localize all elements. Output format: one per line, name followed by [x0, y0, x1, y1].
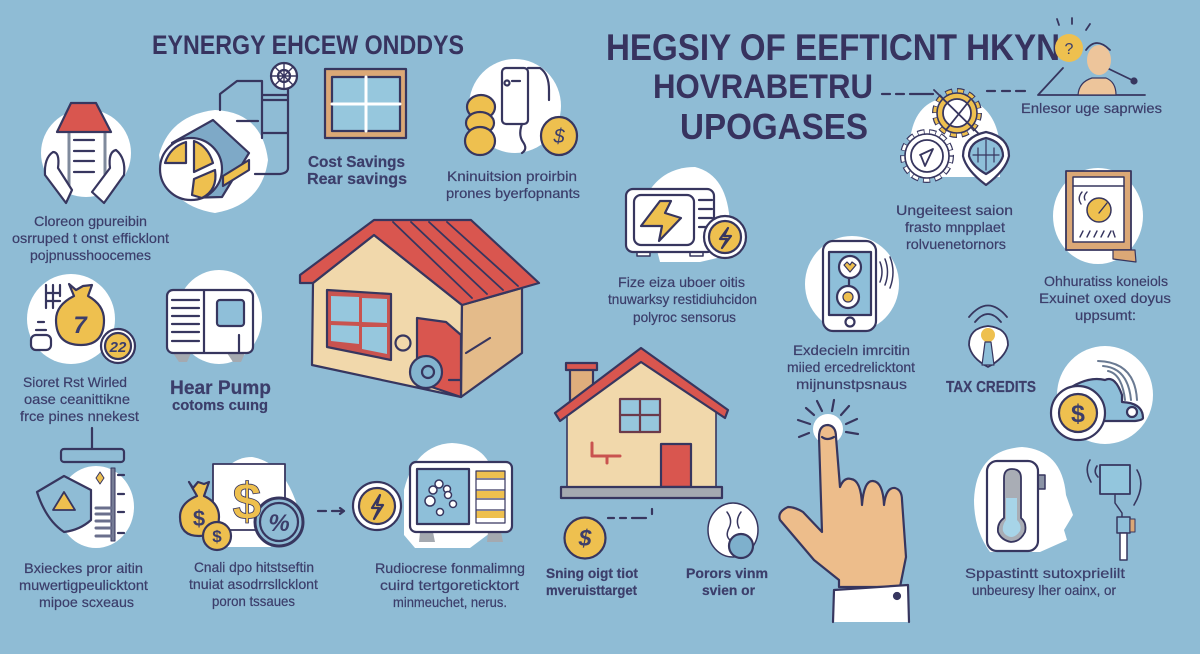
panel: advisor: [1021, 18, 1162, 116]
panel: draft check: [686, 503, 768, 598]
caption: frce pines nnekest: [20, 408, 139, 424]
caption: mveruisttarget: [546, 582, 637, 598]
icon: money bag and coin: [27, 274, 135, 364]
icon: bag figure: 7: [73, 312, 88, 339]
caption: svien or: [702, 582, 756, 598]
caption: Cloreon gpureibin: [34, 213, 147, 229]
main title: HOVRABETRU: [653, 68, 873, 106]
icon: coin machine: [1051, 346, 1153, 444]
panel: pointing hand: [779, 400, 909, 622]
caption: [12, 213, 169, 263]
caption: Porors vinm: [686, 565, 768, 581]
caption: Rear savings: [307, 171, 407, 188]
caption: poron tssaues: [212, 593, 295, 609]
caption: [170, 378, 271, 414]
arrow: dashed connector right: [987, 90, 1025, 92]
arrow: dashed connector: [318, 508, 344, 514]
caption: mipoe scxeaus: [39, 594, 134, 610]
icon: percent bolt: %: [268, 510, 290, 537]
main title: HEGSIY OF EEFTICNT HKYN: [606, 27, 1060, 68]
arrow: dashed connector left: [882, 93, 933, 95]
icon: coin symbol: $: [552, 126, 565, 148]
icon: phone: [805, 236, 899, 332]
icon: unit with bolt: [626, 167, 746, 262]
caption: Bxieckes pror aitin: [24, 560, 143, 576]
icon: question mark: ?: [1065, 41, 1074, 58]
icon: dollar coin: [564, 518, 606, 558]
icon: thermometer device: [974, 447, 1073, 552]
caption: Ungeiteest saion: [896, 202, 1013, 218]
caption: pojpnusshoocemes: [30, 247, 151, 263]
panel: thermostat and sensor: [965, 447, 1141, 598]
caption: prones byerfopnants: [446, 185, 580, 201]
caption: Sppastintt sutoxprielilt: [965, 565, 1125, 581]
caption: unbeuresy lher oainx, or: [972, 582, 1116, 598]
panel: drum machine: [159, 63, 297, 213]
caption: [189, 559, 318, 609]
caption: Kninuitsion proirbin: [447, 168, 577, 184]
panel: smart phone: [787, 236, 915, 392]
panel: appliance with coins: [446, 59, 580, 201]
caption: [608, 274, 757, 325]
panel: electrical unit: [608, 167, 757, 325]
panel: safety shield: [19, 428, 148, 610]
caption: frasto mnpplaet: [905, 219, 1005, 235]
icon: air circle: [708, 503, 758, 558]
caption: minmeuchet, nerus.: [393, 594, 507, 610]
panel: insulation document: [12, 103, 169, 263]
icon: money document: [180, 457, 303, 550]
panel: money bag: [20, 274, 139, 424]
icon: house document in hands: [41, 103, 131, 203]
caption: Ohhuratiss koneiols: [1044, 273, 1168, 289]
icon: window: [325, 69, 406, 138]
main title: UPOGASES: [680, 106, 868, 147]
caption: Fize eiza uboer oitis: [618, 274, 745, 290]
caption: Cost Savings: [308, 154, 405, 171]
caption: Exuinet oxed doyus: [1039, 290, 1171, 306]
icon: large house: [300, 220, 539, 397]
caption: mijnunstpsnaus: [796, 376, 907, 392]
caption: [965, 565, 1125, 598]
left heading: EYNERGY EHCEW ONDDYS: [152, 30, 464, 60]
caption: uppsumt:: [1075, 307, 1136, 323]
glow behind fingertip: [813, 414, 843, 444]
panel: framed thermostat: [1039, 168, 1171, 323]
caption: Rudiocrese fonmalimng: [375, 560, 525, 576]
caption: muwertigpeulicktont: [19, 577, 148, 593]
caption: polyroc sensorus: [633, 309, 736, 325]
icon: heat pump unit: [167, 270, 262, 364]
icon: coin dollar: $: [212, 527, 222, 546]
icon: appliance and coins: [465, 59, 577, 155]
panel: rebates money: [180, 457, 318, 609]
panel: heat pump: [167, 270, 271, 414]
panel: energy monitor: [353, 443, 525, 610]
caption: osrruped t onst efficklont: [12, 230, 169, 246]
icon: hanging bar: [61, 428, 124, 462]
panel: tax credits: [946, 306, 1153, 444]
caption: miied ercedrelicktont: [787, 359, 915, 375]
icon: drum with pipes and fan: [159, 63, 297, 213]
icon: shield and gauge: [37, 466, 134, 548]
icon: gears: [903, 90, 1009, 185]
caption: [446, 168, 580, 201]
caption: Hear Pump: [170, 378, 271, 399]
caption: cotoms cuıng: [172, 397, 268, 414]
icon: bag dollar: $: [193, 506, 205, 531]
panel: small house: [546, 348, 728, 598]
icon: wifi pin: [969, 306, 1008, 367]
icon: coin dollar: $: [1071, 400, 1085, 428]
icon: coin figure: 22: [109, 339, 127, 356]
caption: Sning oigt tiot: [546, 565, 638, 581]
arrow: dashed connector: [608, 509, 652, 518]
caption: Enlesor uge saprwies: [1021, 100, 1162, 116]
panel: cost savings window: [307, 69, 407, 188]
caption: oase ceanittikne: [24, 391, 130, 407]
icon: large dollar sign: $: [233, 473, 262, 531]
caption: [686, 565, 768, 598]
icon: shirt cuff: [833, 585, 909, 622]
main title: [606, 27, 1060, 147]
caption: Exdecieln imrcitin: [793, 342, 910, 358]
icon: fingernail: [822, 437, 834, 439]
caption: tnuiat asodrrsllcklont: [189, 576, 318, 592]
icon: person with question bulb: [1038, 18, 1145, 95]
icon: framed dial: [1053, 168, 1143, 264]
caption: tnuwarksy restidiuhcidon: [608, 291, 757, 307]
icon: small house: [555, 348, 728, 498]
caption: [546, 565, 638, 598]
rays around fingertip: [798, 400, 858, 437]
caption: [375, 560, 525, 610]
caption: [896, 202, 1013, 252]
panel: main house: [300, 220, 539, 397]
caption: [20, 374, 139, 424]
heading: TAX CREDITS: [946, 379, 1036, 396]
caption: rolvuenetornors: [906, 236, 1006, 252]
icon: monitor unit: [404, 443, 512, 548]
caption: [307, 154, 407, 188]
caption: [1039, 273, 1171, 323]
icon: wall sensor: [1087, 460, 1141, 560]
caption: [19, 560, 148, 610]
icon: bolt coin: [353, 482, 401, 530]
panel: gears and map pin: [882, 90, 1025, 252]
icon: hand: [779, 425, 906, 587]
caption: Cnali dpo hitstseftin: [194, 559, 314, 575]
icon: coin symbol: $: [578, 525, 592, 551]
caption: Sioret Rst Wirled: [23, 374, 127, 390]
caption: [787, 342, 915, 392]
caption: cuird tertgoreticktort: [380, 577, 519, 593]
